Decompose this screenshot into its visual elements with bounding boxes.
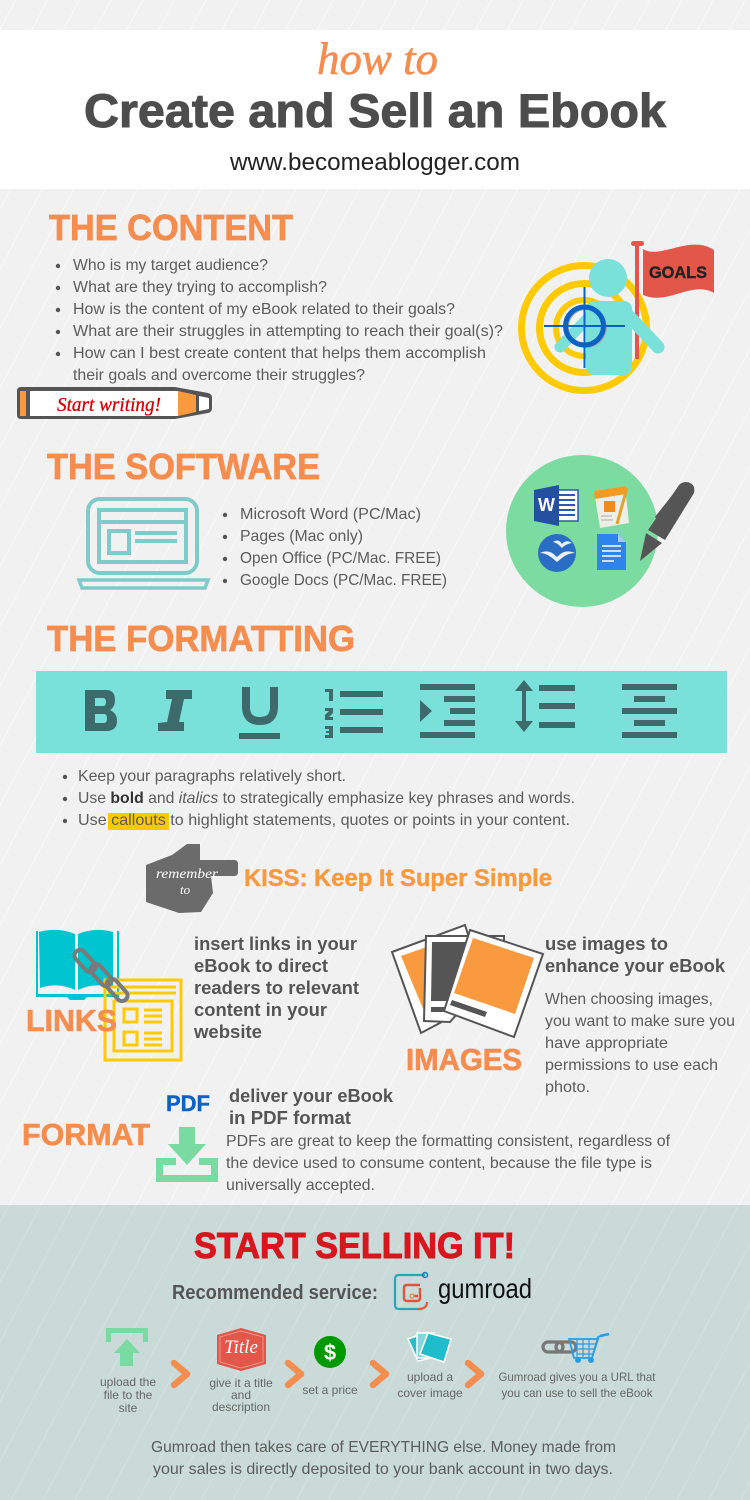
icon: link and cart (543, 1334, 609, 1363)
section: the formatting (36, 618, 727, 913)
icon: title badge: Title (224, 1337, 258, 1358)
icon: pdf download: PDF (166, 1091, 210, 1116)
recommended service label: Recommended service: (172, 1282, 378, 1304)
format description: universally accepted. (226, 1177, 375, 1194)
icon: underline (239, 687, 280, 736)
icon: software apps circle with pen (506, 455, 694, 607)
step text: give it a title (209, 1376, 273, 1390)
step text: upload the (100, 1375, 156, 1389)
links description: readers to relevant (194, 978, 359, 998)
step text: file to the (104, 1388, 153, 1402)
content questions list: How can I best create content that helps them accomplish (73, 345, 486, 362)
software list (223, 506, 447, 589)
icon: pages (594, 486, 629, 528)
step 3: price (302, 1336, 358, 1397)
format heading (229, 1086, 394, 1128)
images description (545, 991, 735, 1096)
section: format (22, 1086, 671, 1194)
images heading (545, 934, 726, 976)
links description: content in your (194, 1000, 327, 1020)
icon: upload (106, 1328, 148, 1366)
arrow 1 (174, 1363, 187, 1385)
format description: PDFs are great to keep the formatting consistent, regardless of (226, 1133, 671, 1150)
icon: indent (420, 684, 475, 738)
links description: eBook to direct (194, 956, 328, 976)
logo: gumroad (395, 1272, 532, 1309)
heading: the content: THE CONTENT (49, 207, 293, 248)
arrow 3 (373, 1363, 386, 1385)
icon: document (105, 980, 181, 1060)
step 2: title (209, 1328, 273, 1414)
toolbar bar (36, 671, 727, 753)
icon: laptop (79, 499, 208, 588)
content questions list (56, 257, 503, 384)
step text: you can use to sell the eBook (502, 1386, 653, 1400)
arrow 4 (468, 1363, 481, 1385)
content questions list: their goals and overcome their struggles? (73, 367, 365, 384)
icon: pointing hand (146, 844, 238, 913)
format heading: in PDF format (229, 1108, 351, 1128)
icon: open book (36, 930, 119, 1000)
icon: line spacing (515, 680, 575, 732)
images description: When choosing images, (545, 991, 713, 1008)
images heading: enhance your eBook (545, 956, 726, 976)
kiss text: KISS: Keep It Super Simple (244, 865, 552, 892)
section: the content (17, 207, 714, 419)
format description: the device used to consume content, because the file type is (226, 1155, 652, 1172)
icon: pdf download (156, 1091, 218, 1182)
section: the software (47, 446, 694, 607)
links description (193, 934, 359, 1042)
icon: open office (538, 534, 576, 572)
icon: goals target with person and flag: GOALS (649, 263, 707, 282)
label: images: IMAGES (406, 1042, 522, 1077)
label: links: LINKS (26, 1003, 117, 1038)
icon: center align (622, 684, 677, 738)
software list: Google Docs (PC/Mac. FREE) (240, 572, 447, 589)
software list: Open Office (PC/Mac. FREE) (240, 550, 441, 567)
step text: set a price (302, 1383, 358, 1397)
icon: word (534, 485, 578, 526)
step text (498, 1370, 656, 1400)
step text (397, 1370, 463, 1400)
content questions list: How is the content of my eBook related to their goals? (73, 301, 455, 318)
step text: Gumroad gives you a URL that (498, 1370, 656, 1384)
icon: google docs (597, 534, 626, 570)
website url: www.becomeablogger.com (229, 149, 520, 176)
icon: chain link (72, 948, 130, 1003)
callout: remember to kiss (146, 844, 552, 913)
step 5: url (498, 1334, 656, 1400)
closing text: Gumroad then takes care of EVERYTHING else. Money made from (151, 1439, 616, 1456)
icon: photo stack (392, 925, 543, 1037)
panel: start selling (0, 1205, 750, 1500)
images description: photo. (545, 1079, 590, 1096)
marker: start writing: Start writing! (57, 394, 161, 416)
format heading: deliver your eBook (229, 1086, 394, 1106)
images heading: use images to (545, 934, 668, 954)
software list: Pages (Mac only) (240, 528, 363, 545)
heading: the software: THE SOFTWARE (47, 446, 320, 487)
icon: italic (158, 690, 192, 731)
content questions list: What are they trying to accomplish? (73, 279, 327, 296)
section: images (392, 925, 735, 1096)
icon: bold (85, 690, 117, 731)
header band (0, 30, 750, 189)
icon: pointing hand: remember (156, 867, 219, 882)
heading: start selling it: START SELLING IT! (194, 1225, 515, 1266)
logo: gumroad: gumroad (438, 1273, 532, 1304)
icon: pen (640, 482, 694, 561)
formatting tips list (63, 768, 575, 830)
step text: description (212, 1400, 270, 1414)
step 4: cover image (397, 1333, 463, 1400)
software list: Microsoft Word (PC/Mac) (240, 506, 421, 523)
format description (226, 1133, 671, 1194)
links description: insert links in your (194, 934, 357, 954)
step text (100, 1375, 156, 1415)
icon: photos (408, 1333, 451, 1362)
step text (209, 1376, 273, 1414)
closing text: your sales is directly deposited to your bank account in two days. (153, 1461, 613, 1478)
content questions list: What are their struggles in attempting to reach their goal(s)? (73, 323, 503, 340)
closing text (151, 1439, 616, 1478)
content questions list: Who is my target audience? (73, 257, 268, 274)
images description: have appropriate (545, 1035, 668, 1052)
images description: you want to make sure you (545, 1013, 735, 1030)
step 1: upload (100, 1328, 156, 1415)
step text: and (231, 1388, 251, 1402)
arrow 2 (288, 1363, 301, 1385)
label: format: FORMAT (22, 1117, 150, 1152)
heading: the formatting: THE FORMATTING (47, 618, 355, 659)
formatting tips list: Use bold and italics to strategically emphasize key phrases and words. (78, 790, 575, 807)
section: links (26, 930, 359, 1060)
icon: pointing hand: to (180, 882, 191, 897)
icon: goals target with person and flag (522, 241, 714, 390)
images description: permissions to use each (545, 1057, 718, 1074)
icon: dollar coin: $ (324, 1340, 336, 1365)
icon: word: W (538, 495, 555, 515)
formatting tips list: Use callouts to highlight statements, quotes or points in your content. (78, 812, 570, 829)
title: Create and Sell an Ebook (84, 84, 667, 137)
step text: site (119, 1401, 138, 1415)
marker: start writing (17, 387, 212, 419)
formatting tips list: Keep your paragraphs relatively short. (78, 768, 346, 785)
step text: cover image (397, 1386, 463, 1400)
step text: upload a (407, 1370, 453, 1384)
icon: numbered list (325, 689, 383, 738)
script heading: how to: how to (317, 33, 438, 84)
links description: website (193, 1022, 262, 1042)
